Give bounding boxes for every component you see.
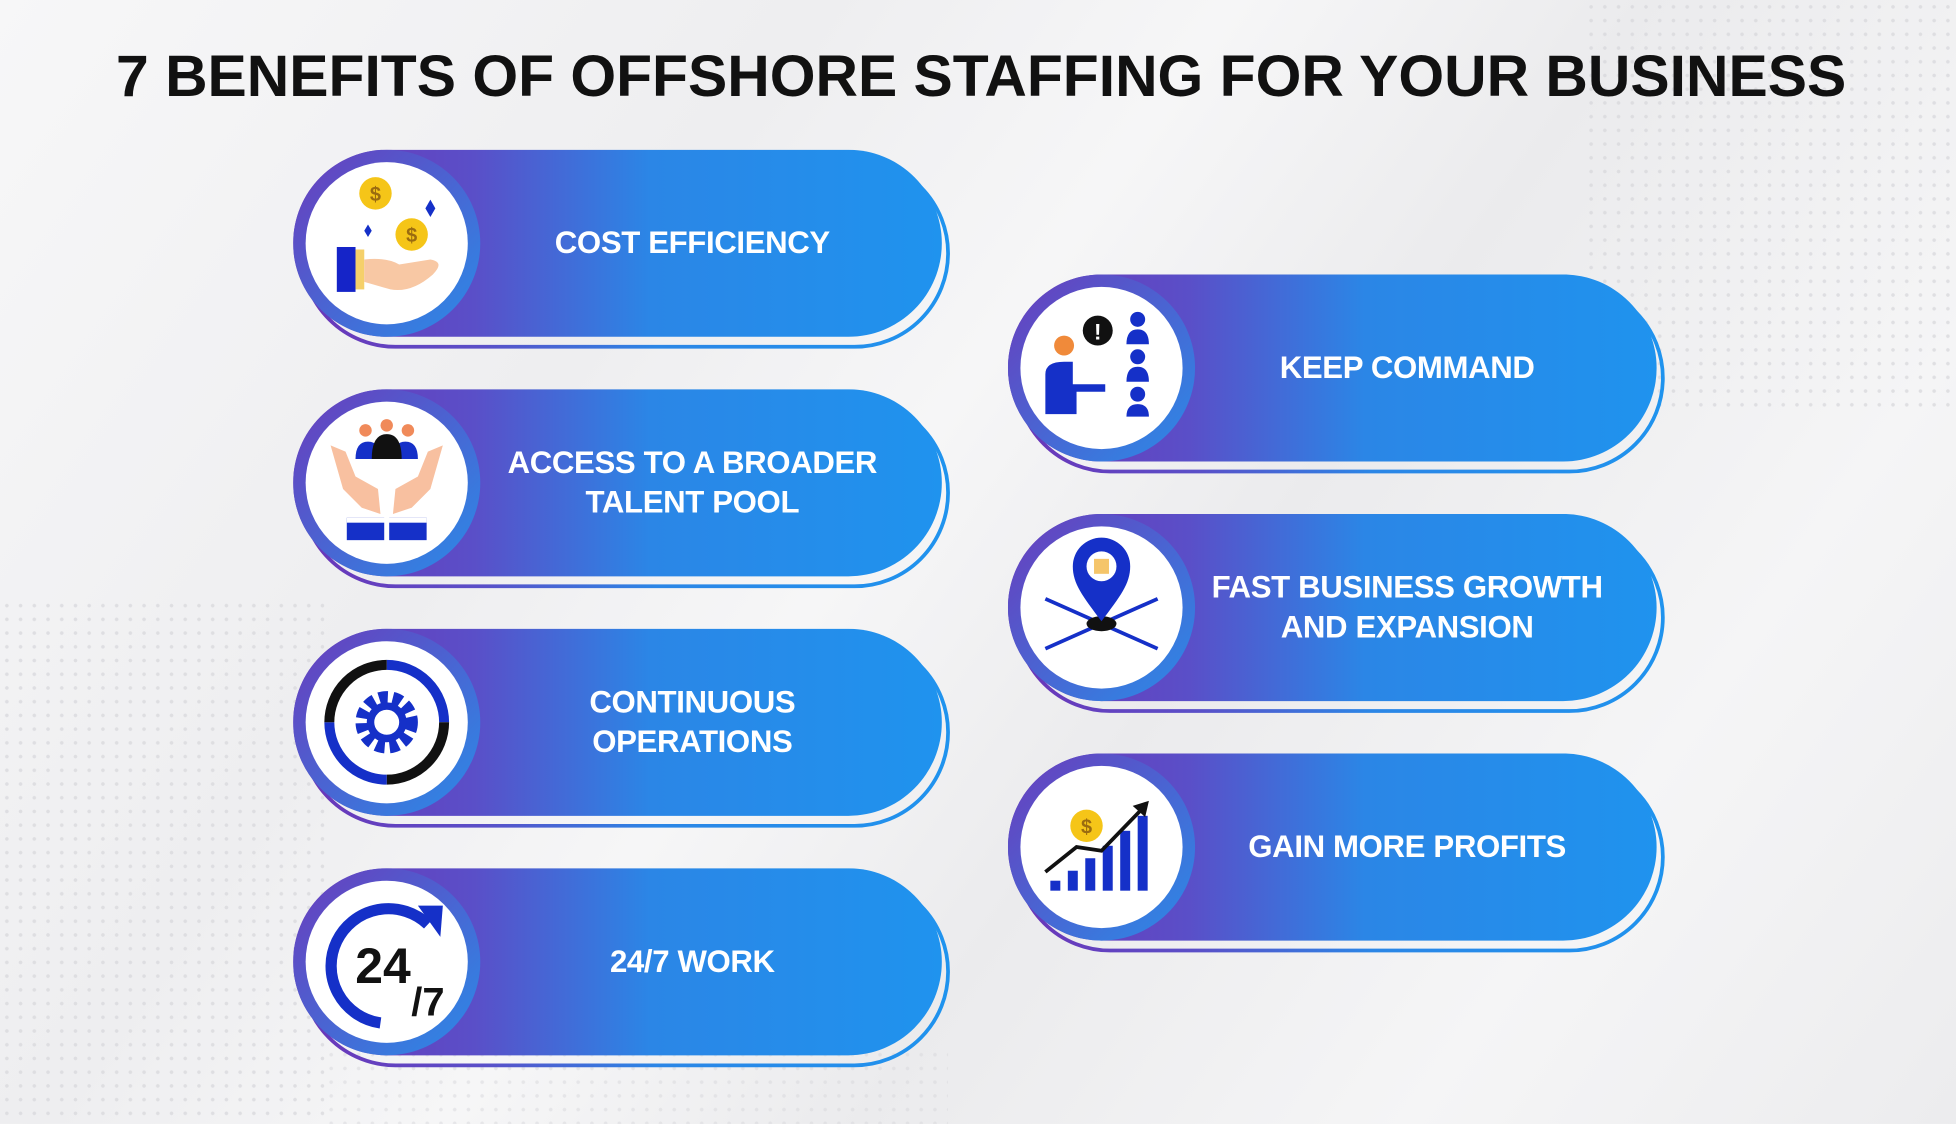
icon: growth chart with coin: $ bbox=[1081, 816, 1092, 838]
panel: keep command bbox=[1008, 274, 1665, 474]
icon: 24/7: 24 bbox=[355, 938, 411, 994]
icon: hands holding people bbox=[331, 419, 443, 540]
panel: 24/7 work bbox=[293, 868, 950, 1068]
panel: profits: GAIN MORE PROFITS bbox=[1248, 830, 1566, 864]
panel: talent pool: TALENT POOL bbox=[586, 485, 799, 520]
icon: coins in hand: $ bbox=[370, 184, 381, 206]
panel: continuous operations bbox=[293, 628, 950, 828]
title: 7 BENEFITS OF OFFSHORE STAFFING FOR YOUR BUSINESS bbox=[116, 44, 1846, 109]
panel: fast growth: AND EXPANSION bbox=[1281, 610, 1533, 645]
icon: location pin with arrows bbox=[1045, 538, 1158, 649]
panel: talent pool bbox=[293, 389, 950, 588]
panel: continuous operations: OPERATIONS bbox=[592, 725, 792, 760]
icon: coins in hand: $ bbox=[406, 225, 417, 247]
icon: growth chart with coin bbox=[1045, 801, 1149, 891]
panel: cost efficiency bbox=[293, 150, 950, 349]
icon: 24/7: /7 bbox=[411, 980, 445, 1024]
panel: keep command: KEEP COMMAND bbox=[1280, 351, 1535, 385]
panel: profits bbox=[1008, 754, 1665, 952]
panel: fast growth: FAST BUSINESS GROWTH bbox=[1212, 570, 1603, 605]
panel: fast growth bbox=[1008, 514, 1665, 713]
icon: leader commanding team: ! bbox=[1094, 319, 1101, 344]
icon: gear cycle bbox=[329, 665, 444, 780]
panel: continuous operations: CONTINUOUS bbox=[589, 685, 795, 720]
icon: 24/7 bbox=[331, 906, 445, 1024]
icon: leader commanding team bbox=[1045, 312, 1149, 417]
panel: cost efficiency: COST EFFICIENCY bbox=[555, 226, 830, 261]
panel: talent pool: ACCESS TO A BROADER bbox=[508, 445, 877, 480]
icon: coins in hand bbox=[337, 177, 439, 292]
panel: 24/7 work: 24/7 WORK bbox=[610, 944, 775, 979]
